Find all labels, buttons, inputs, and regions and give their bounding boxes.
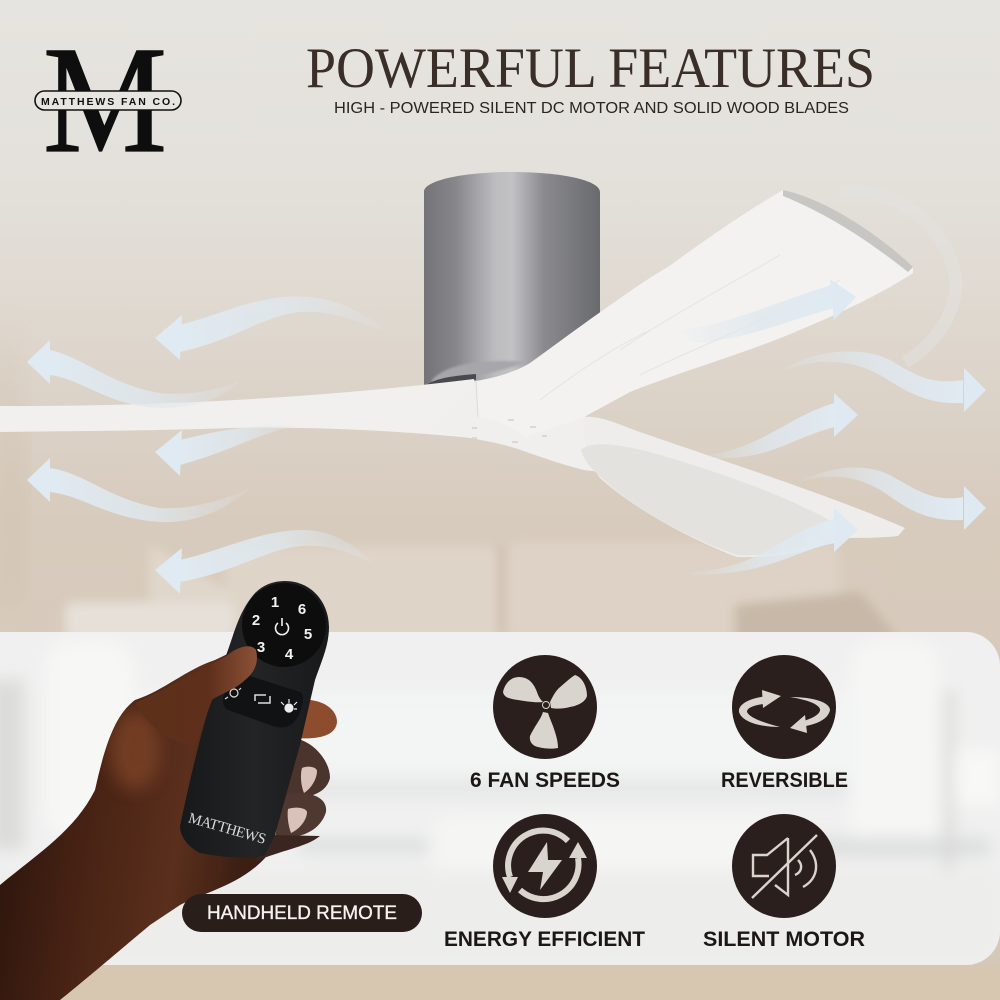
- swirl: [840, 191, 956, 362]
- background: blurred sofa: [65, 542, 900, 642]
- title: POWERFUL FEATURES: [306, 37, 875, 100]
- label: handheld remote: HANDHELD REMOTE: [207, 903, 397, 924]
- hand: back highlight: [109, 710, 161, 790]
- hand holding remote: [0, 581, 337, 1000]
- feature: silent motor: SILENT MOTOR: [703, 928, 865, 951]
- feature: reversible: REVERSIBLE: [721, 769, 848, 792]
- blade underside: lower right: [581, 444, 838, 555]
- logo: Matthews Fan Co.: MATTHEWS FAN CO.: [41, 96, 175, 108]
- hand: index finger: [295, 700, 337, 738]
- subtitle: HIGH - POWERED SILENT DC MOTOR AND SOLID WOOD BLADES: [334, 100, 849, 117]
- remote: brand: MATTHEWS: [186, 810, 268, 848]
- motor housing: [424, 172, 600, 387]
- blade: lower right: [584, 417, 905, 557]
- remote: button row: [223, 676, 303, 727]
- hub bolts: [472, 420, 547, 442]
- label: handheld remote: [182, 894, 422, 932]
- feature: 6 fan speeds: 6 FAN SPEEDS: [470, 769, 620, 792]
- hand: thumb: [135, 646, 257, 745]
- hand: middle finger: [283, 738, 330, 797]
- arrow on upper blade: [680, 279, 856, 342]
- blade: hub: [430, 384, 600, 472]
- feature: silent motor: [703, 814, 865, 951]
- remote: light bright icon: [281, 699, 297, 712]
- arrow 4: [27, 458, 250, 522]
- panel: frosted feature panel: [0, 632, 1000, 965]
- fan blades: [0, 190, 913, 557]
- remote: digits: 5: [304, 626, 312, 643]
- remote: digits: [252, 594, 312, 663]
- arrow middle: [705, 393, 858, 458]
- remote: digits: 2: [252, 612, 260, 629]
- arrow 2: [27, 340, 240, 408]
- remote: digits: 1: [271, 594, 279, 611]
- icon: fan: [503, 675, 587, 749]
- icon: muted speaker: [752, 835, 817, 898]
- icon: rotation arrows: [739, 690, 830, 733]
- remote: light dim icon: [225, 685, 241, 699]
- remote body: [180, 581, 329, 858]
- icon: lightning with cycle arrows: [502, 831, 587, 899]
- hand: nails: [288, 767, 317, 833]
- logo: Matthews Fan Co.: M: [43, 16, 167, 185]
- remote: power icon: [276, 618, 289, 635]
- blade: upper right: [475, 190, 913, 437]
- blade: left: [0, 379, 490, 440]
- arrow upper far right: [780, 351, 986, 412]
- blade wood grain: [540, 255, 840, 400]
- hand: palm and wrist: [0, 648, 265, 1000]
- arrow 5: [155, 530, 375, 594]
- remote: digits: 3: [257, 639, 265, 656]
- feature: energy efficient: ENERGY EFFICIENT: [444, 928, 645, 951]
- arrow lower blade: [690, 508, 858, 575]
- feature: reversible: [721, 655, 848, 792]
- remote: dial: [242, 583, 326, 667]
- feature: 6 fan speeds: [470, 655, 620, 792]
- arrow 1: [155, 296, 385, 360]
- arrow 3: [155, 425, 300, 476]
- remote: reverse icon: [255, 695, 270, 703]
- arrow lower far right: [800, 467, 986, 530]
- airflow arrows: right: [680, 191, 986, 575]
- blade tip edge: upper right: [783, 190, 913, 272]
- airflow arrows: left: [27, 296, 385, 594]
- remote: digits: 6: [298, 601, 306, 618]
- hand: ring finger: [275, 793, 326, 838]
- feature: energy efficient: [444, 814, 645, 951]
- blade seam: [476, 381, 478, 417]
- remote: digits: 4: [285, 646, 294, 663]
- hand: pinky base: [255, 835, 320, 862]
